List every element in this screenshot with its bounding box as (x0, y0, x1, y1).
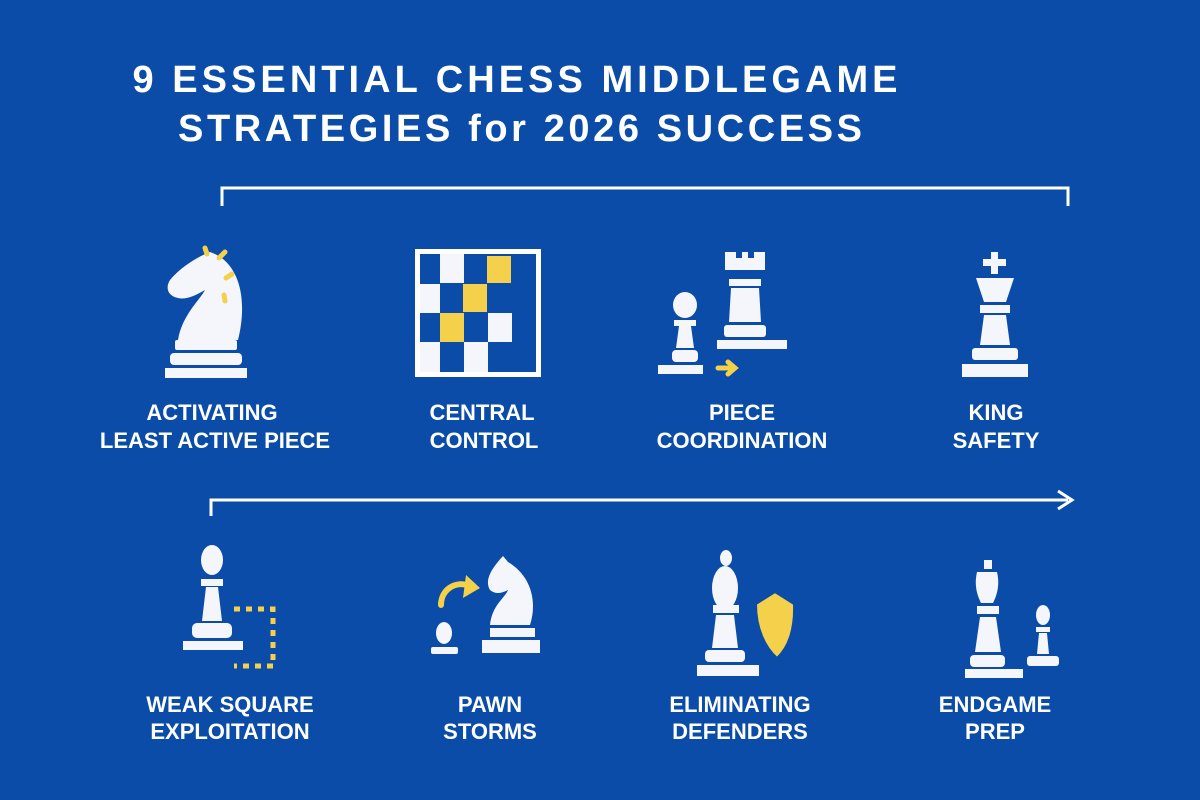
label: pawn storms: PAWN (458, 692, 522, 717)
label: central control (429, 400, 538, 453)
label: activating (100, 400, 330, 453)
label: king safety: SAFETY (953, 428, 1040, 453)
label: piece coordination: PIECE (709, 400, 775, 425)
label: endgame prep: PREP (965, 719, 1025, 744)
arrow line (211, 491, 1072, 516)
icon: bishop and shield (697, 550, 794, 676)
title (132, 59, 898, 150)
icon: king (962, 252, 1028, 377)
label: piece coordination (657, 400, 827, 453)
title: 9 ESSENTIAL CHESS MIDDLEGAME (132, 59, 898, 101)
label: activating: ACTIVATING (146, 400, 278, 425)
label: pawn storms (443, 692, 537, 744)
icon: weak square (183, 545, 273, 666)
label: central control: CONTROL (430, 428, 538, 453)
label: eliminating defenders (669, 692, 811, 744)
icon: pawn and rook (658, 252, 787, 374)
label: central control: CENTRAL (429, 400, 535, 425)
label: endgame prep: ENDGAME (939, 692, 1051, 717)
title: STRATEGIES for 2026 SUCCESS (178, 108, 862, 150)
icon: pawn storm (431, 556, 540, 654)
icon: knight (165, 248, 247, 378)
icon: board (415, 249, 541, 377)
bracket line (222, 188, 1068, 206)
label: weak square: WEAK SQUARE (146, 692, 314, 717)
labels row 1 (100, 400, 1040, 453)
labels row 2 (146, 692, 1051, 744)
label: king safety (953, 400, 1040, 453)
label: endgame prep (939, 692, 1051, 744)
label: king safety: KING (968, 400, 1024, 425)
label: piece coordination: COORDINATION (657, 428, 827, 453)
label: eliminating defenders: DEFENDERS (672, 719, 808, 744)
label: eliminating defenders: ELIMINATING (669, 692, 811, 717)
label: weak square: EXPLOITATION (150, 719, 310, 744)
icon: endgame king and pawn (965, 560, 1059, 678)
label: weak square (146, 692, 314, 744)
label: activating: LEAST ACTIVE PIECE (100, 428, 330, 453)
label: pawn storms: STORMS (443, 719, 537, 744)
